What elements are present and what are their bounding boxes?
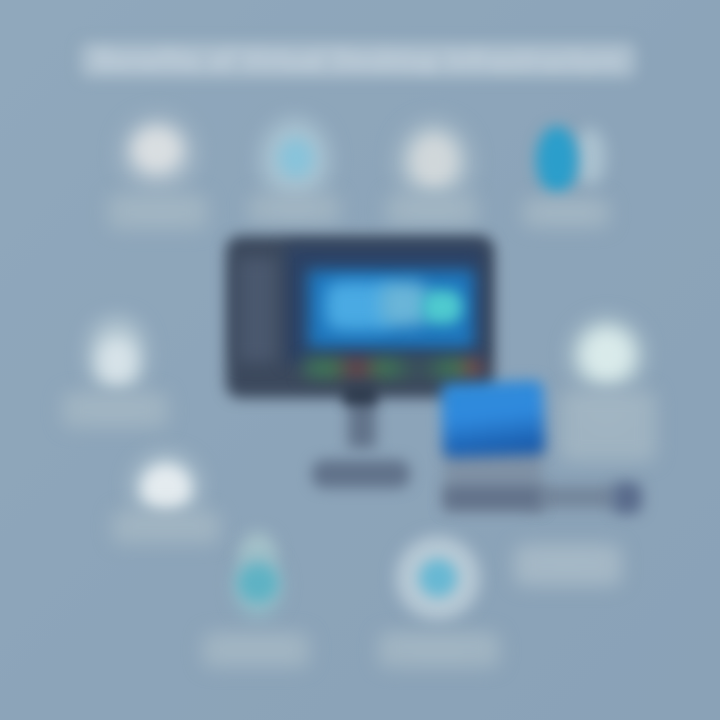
laptop <box>432 372 649 522</box>
label: top item 2: Data <box>281 208 307 222</box>
icon: left item 1 <box>81 312 153 394</box>
monitor base <box>312 460 410 488</box>
label: top item 3 <box>386 194 478 226</box>
title: Benefits of Virtual Desktop Infrastructure <box>94 45 622 75</box>
monitor top band <box>286 246 484 362</box>
icon: top item 3 <box>392 116 476 198</box>
monitor neck shadow <box>344 386 376 404</box>
label: top item 4: Scalability <box>536 198 596 212</box>
laptop keyboard shade <box>444 486 542 510</box>
icon: top item 4 <box>527 118 610 198</box>
icon: right item <box>563 311 651 392</box>
laptop extension strip <box>530 486 616 508</box>
label: top item 1: Cost Savings <box>120 194 196 208</box>
monitor screen chart <box>308 270 474 348</box>
label: top item 1: Budget <box>137 208 179 222</box>
label: lower right item: Updates <box>544 558 592 572</box>
icon: left item 2 <box>126 448 206 516</box>
monitor stand <box>348 390 376 448</box>
label: left item 1 <box>62 392 168 428</box>
label: top item 4 <box>522 198 610 228</box>
label: top item 2 <box>248 194 340 224</box>
label: lower right item <box>514 544 622 586</box>
label: left item 1: Support <box>92 406 138 420</box>
label: bottom item 2: Disaster Recovery <box>387 632 491 646</box>
label: top item 4: Growth <box>545 212 587 226</box>
label: bottom item 1 <box>202 632 310 668</box>
label: bottom item 1: Productivity <box>221 632 291 646</box>
label: right item: Energy <box>588 390 628 404</box>
label: right item: Green <box>591 418 625 432</box>
label: lower right item: Centralized <box>536 544 600 558</box>
label: top item 3: Flexibility <box>404 194 460 208</box>
monitor screen highlight: left <box>326 282 394 330</box>
label: top item 3: Access <box>411 208 453 222</box>
label: left item 1: Remote Work <box>76 392 154 406</box>
icon: bottom item 1 <box>231 530 285 619</box>
label: bottom item 1: Performance <box>219 646 293 660</box>
label: left item 2: Management <box>129 510 203 524</box>
laptop screen <box>441 380 545 458</box>
monitor screen highlight: right <box>422 290 462 324</box>
monitor colored row <box>304 358 480 378</box>
label: bottom item 2: Backup <box>417 646 461 660</box>
monitor <box>216 226 504 495</box>
label: top item 2: Security <box>270 194 318 208</box>
laptop accessory <box>612 482 642 514</box>
icon: top item 2 <box>256 114 334 196</box>
label: top item 1 <box>108 194 208 230</box>
label: right item <box>560 390 656 462</box>
icon: top item 1 <box>116 111 200 191</box>
monitor screen highlight: middle <box>380 282 428 326</box>
label: right item: Efficiency <box>580 404 636 418</box>
laptop keyboard <box>444 448 542 510</box>
label: left item 2 <box>112 510 220 544</box>
monitor sidebar <box>238 258 276 362</box>
monitor body <box>226 236 494 398</box>
label: bottom item 2 <box>378 632 500 668</box>
icon: bottom item 2 <box>390 530 486 624</box>
